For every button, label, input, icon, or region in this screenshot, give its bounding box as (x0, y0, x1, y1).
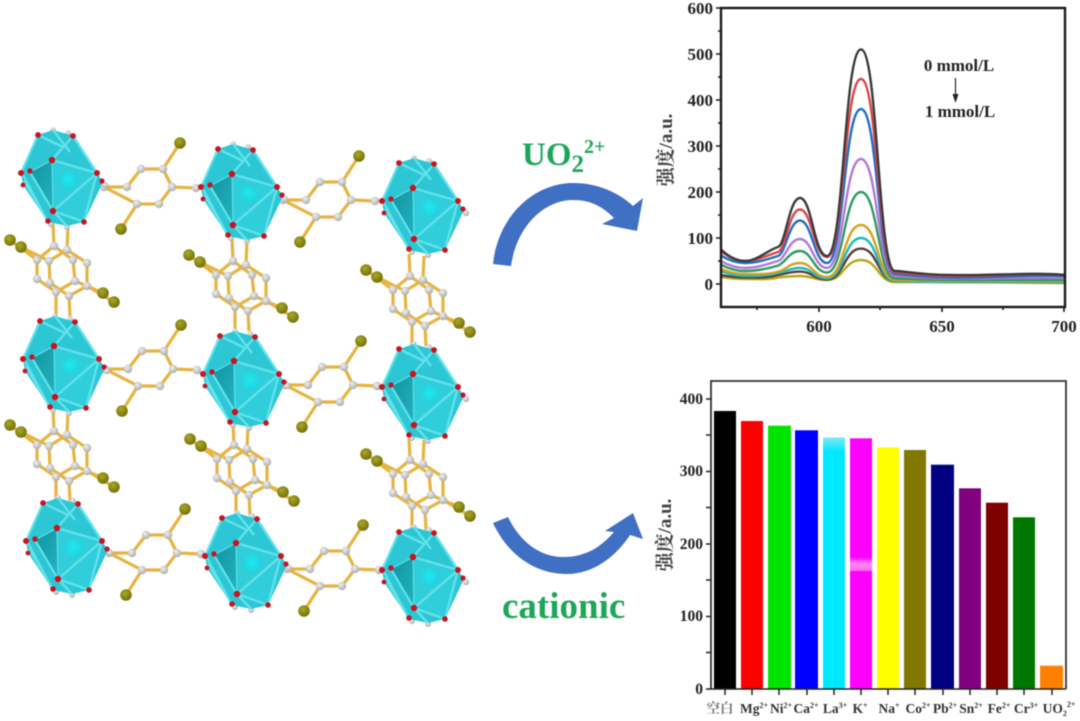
category labels (706, 700, 1076, 718)
bars (714, 411, 1063, 689)
y axis tick labels (688, 0, 713, 294)
y axis tick labels (680, 391, 703, 698)
category labels: La (823, 701, 839, 716)
category labels: 2+ (759, 701, 768, 710)
label: UO2 2+: 2+ (584, 136, 605, 158)
y axis title: 强度/a.u. (654, 114, 677, 186)
category labels: K (852, 701, 863, 716)
y axis tick labels: 100 (688, 229, 713, 248)
category labels: Na (878, 701, 895, 716)
plot frame (711, 381, 1066, 689)
category labels: Mg (740, 701, 759, 716)
category labels: 2+ (1067, 700, 1076, 709)
category labels: Pb (933, 701, 949, 716)
x axis tick labels: 600 (806, 317, 832, 336)
y axis tick labels: 0 (695, 681, 703, 698)
y axis tick labels: 100 (680, 608, 703, 625)
chart: emission spectra (654, 0, 1077, 336)
category labels: Fe (988, 701, 1002, 716)
category labels: 2+ (949, 701, 958, 710)
chart: cation selectivity bars (653, 381, 1076, 718)
arrow: bottom curved arrow (493, 513, 643, 574)
y axis tick labels: 400 (688, 91, 713, 110)
y axis tick labels: 0 (704, 275, 713, 294)
vertical linkers (4, 224, 476, 530)
plot frame (721, 8, 1065, 307)
y axis tick labels: 300 (680, 463, 703, 480)
horizontal linkers (100, 137, 383, 617)
baseline and ticks (706, 399, 1066, 695)
category labels: 2 (1063, 709, 1067, 718)
y axis tick labels: 200 (688, 183, 713, 202)
category labels: UO (1043, 701, 1063, 716)
concentration legend: 1 mmol/L (925, 102, 995, 121)
category labels: 2+ (974, 701, 983, 710)
category labels: Sn (959, 701, 974, 716)
concentration legend (924, 56, 995, 121)
curves (721, 49, 1065, 283)
category labels: + (863, 701, 868, 710)
y axis tick labels: 500 (688, 45, 713, 64)
axis ticks (716, 8, 1064, 312)
category labels: + (895, 701, 900, 710)
panel: crystal framework structure (4, 127, 476, 627)
arrow: top curved arrow (493, 183, 643, 266)
category labels: 2+ (1002, 701, 1011, 710)
category labels: 空白 (706, 700, 734, 716)
category labels: 2+ (810, 701, 819, 710)
category labels: 2+ (783, 701, 792, 710)
y axis tick labels: 200 (680, 536, 703, 553)
y axis title: 强度/a.u. (653, 499, 676, 571)
metal clusters (18, 127, 469, 627)
category labels: 3+ (1030, 701, 1039, 710)
x axis tick labels: 650 (929, 317, 955, 336)
category labels: Ca (793, 701, 810, 716)
category labels: Co (905, 701, 922, 716)
category labels: Ni (770, 701, 783, 716)
label: UO2 2+: 2 (572, 151, 584, 178)
category labels: 3+ (839, 701, 848, 710)
x axis tick labels (806, 317, 1077, 336)
y axis tick labels: 300 (688, 137, 713, 156)
label: UO2 2+: UO (522, 137, 572, 173)
category labels: 2+ (922, 701, 931, 710)
concentration legend: 0 mmol/L (924, 56, 994, 75)
category labels: Cr (1014, 701, 1030, 716)
x axis tick labels: 700 (1051, 317, 1077, 336)
label: cationic: cationic (502, 586, 625, 627)
y axis tick labels: 400 (680, 391, 703, 408)
